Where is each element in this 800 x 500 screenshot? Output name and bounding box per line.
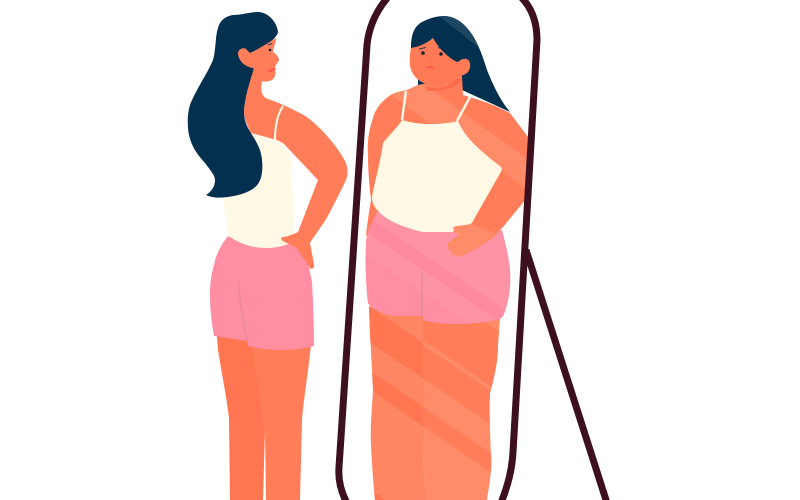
figure: real woman [188,12,348,500]
mirror stand [526,250,607,500]
camisole [223,133,294,248]
reflected shorts [366,212,510,324]
illustration: woman looking in a mirror [188,0,610,500]
reflected hand [447,224,496,257]
back hair [418,50,510,112]
arm, shoulder and neck [244,66,348,269]
reflected legs [369,306,500,500]
reflected forearm [470,170,526,240]
reflected brows and eyes [419,48,445,56]
back leg [216,325,265,500]
neck shadow [425,78,462,91]
strap over shoulder [275,106,283,140]
figure: mirror reflection [366,16,528,500]
eye [268,44,272,51]
front leg [250,325,313,500]
reflected straps [402,91,470,121]
face [238,38,279,82]
reflected face [410,35,470,85]
reflected camisole [372,120,502,232]
mouth [268,68,276,72]
mirror frame [339,0,537,500]
hair [188,12,278,198]
reflected nose [429,56,431,61]
shorts [210,236,314,350]
reflected torso and arms [366,76,528,236]
reflected front hair [411,16,487,70]
reflected frown [425,66,436,69]
